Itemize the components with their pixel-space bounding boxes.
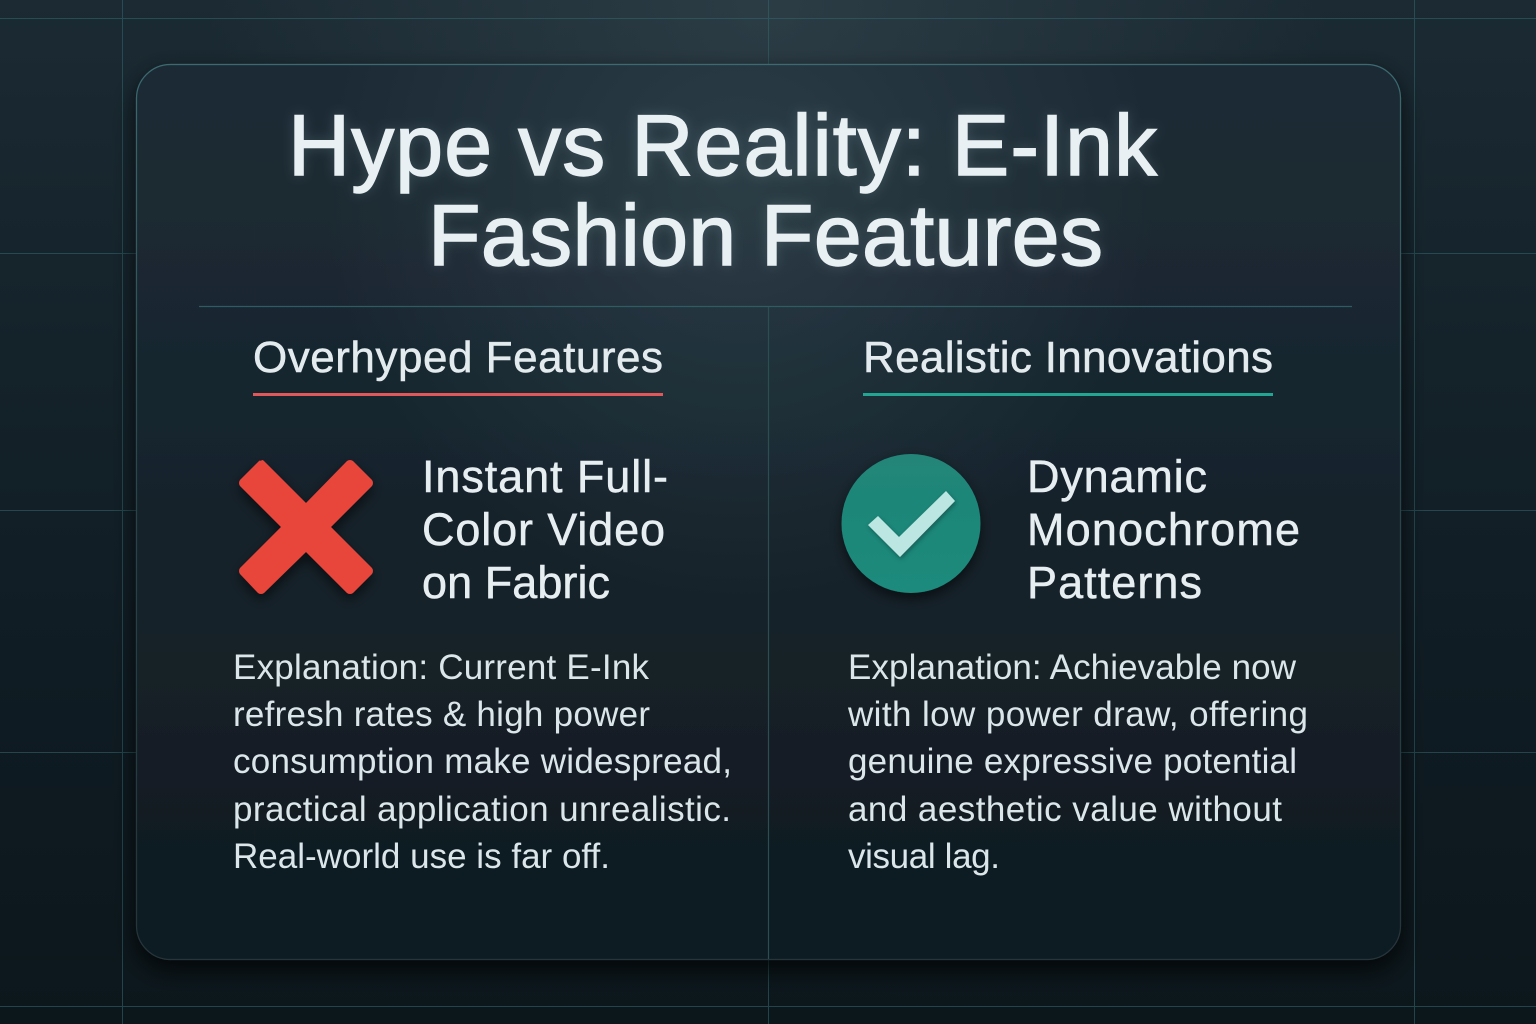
- feature label: dynamic monochrome patterns: [1027, 451, 1300, 608]
- explanation: overhyped: Explanation: Current E-Ink: [233, 648, 650, 687]
- heading: overhyped features: Overhyped Features: [253, 333, 663, 382]
- explanation: overhyped: Real-world use is far off.: [233, 837, 610, 876]
- icon: red cross: [239, 460, 373, 594]
- explanation: realistic: [847, 648, 1308, 876]
- panel: overhyped features: [233, 333, 732, 876]
- explanation: overhyped: consumption make widespread,: [233, 742, 732, 781]
- feature label: instant full-color video: Color Video: [422, 504, 665, 555]
- title: [288, 98, 1158, 284]
- title: Fashion Features: [428, 188, 1103, 284]
- feature label: instant full-color video: on Fabric: [422, 557, 610, 608]
- heading: realistic innovations: Realistic Innovations: [863, 333, 1273, 382]
- panel: comparison card: [136, 64, 1400, 960]
- feature label: dynamic monochrome patterns: Dynamic: [1027, 451, 1207, 502]
- feature label: dynamic monochrome patterns: Monochrome: [1027, 504, 1300, 555]
- feature label: dynamic monochrome patterns: Patterns: [1027, 557, 1202, 608]
- explanation: realistic: Explanation: Achievable now: [848, 648, 1297, 687]
- explanation: realistic: and aesthetic value without: [848, 790, 1282, 829]
- explanation: realistic: genuine expressive potential: [848, 742, 1297, 781]
- panel: realistic innovations: [842, 333, 1308, 876]
- explanation: overhyped: [233, 648, 732, 876]
- explanation: realistic: visual lag.: [848, 837, 1000, 876]
- explanation: overhyped: refresh rates & high power: [233, 695, 650, 734]
- explanation: overhyped: practical application unrealistic.: [233, 790, 731, 829]
- feature label: instant full-color video: Instant Full-: [422, 451, 668, 502]
- feature label: instant full-color video: [422, 451, 668, 608]
- title: Hype vs Reality: E-Ink: [288, 98, 1158, 194]
- explanation: realistic: with low power draw, offering: [847, 695, 1308, 734]
- icon: green check: [842, 454, 980, 593]
